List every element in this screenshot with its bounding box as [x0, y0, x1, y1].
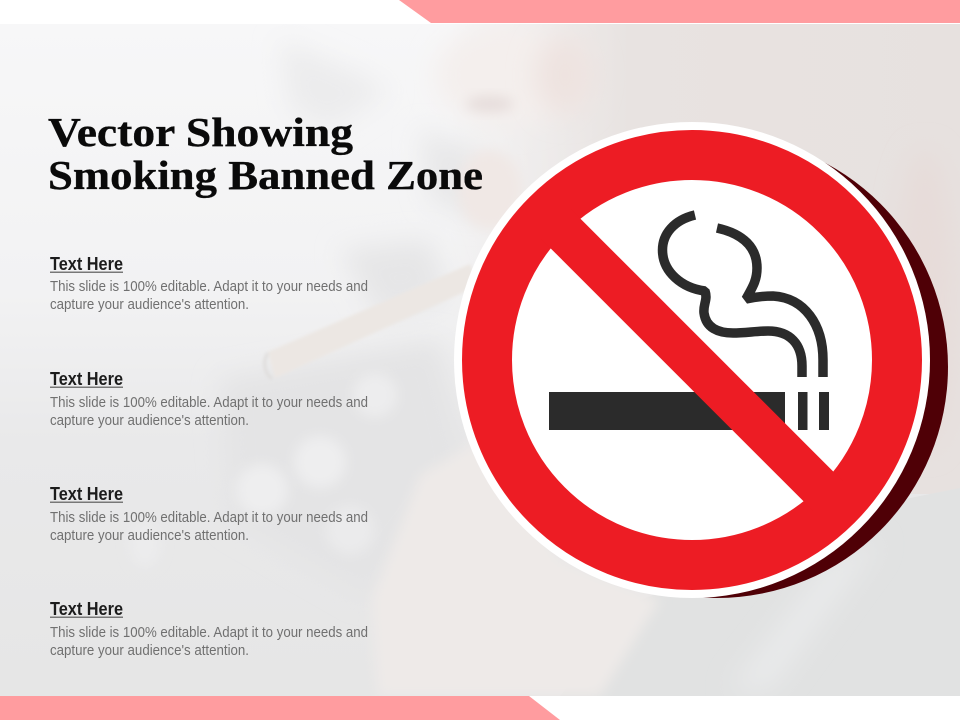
- text block 1: [50, 254, 368, 313]
- sign drop shadow: [486, 136, 948, 598]
- title: [48, 109, 483, 198]
- text block 3: This slide is 100% editable. Adapt it to your needs and: [50, 509, 368, 526]
- text block 2: This slide is 100% editable. Adapt it to your needs and: [50, 394, 368, 411]
- text block 1: Text Here: [50, 254, 123, 274]
- text block 4: [50, 599, 368, 659]
- text block 3: Text Here: [50, 484, 123, 504]
- prohibition diagonal bar: [556, 224, 828, 496]
- bottom banner: [0, 696, 560, 720]
- cigar: [270, 265, 472, 366]
- text block 4: This slide is 100% editable. Adapt it to your needs and: [50, 624, 368, 641]
- text block 3: [50, 484, 368, 544]
- text block 1: This slide is 100% editable. Adapt it to your needs and: [50, 278, 368, 295]
- bokeh highlights: [242, 470, 282, 510]
- top banner: [399, 0, 960, 23]
- text block 2: capture your audience's attention.: [50, 412, 249, 429]
- sign red ring: [487, 155, 897, 565]
- text block 4: capture your audience's attention.: [50, 642, 249, 659]
- hand: [382, 460, 653, 694]
- text block 3: capture your audience's attention.: [50, 527, 249, 544]
- icon: cigarette: [549, 392, 829, 430]
- shirt lower right: [560, 488, 960, 696]
- sign white rim: [454, 122, 930, 598]
- title: Smoking Banned Zone: [48, 152, 483, 198]
- icon: smoke: [662, 215, 823, 377]
- text block 2: [50, 369, 368, 429]
- text block 4: Text Here: [50, 599, 123, 619]
- no smoking sign: [454, 122, 948, 598]
- shirt highlight streak: [730, 540, 880, 690]
- text block 1: capture your audience's attention.: [50, 296, 249, 313]
- title: Vector Showing: [48, 109, 354, 155]
- text block 2: Text Here: [50, 369, 123, 389]
- face and skin tones: [520, 24, 960, 494]
